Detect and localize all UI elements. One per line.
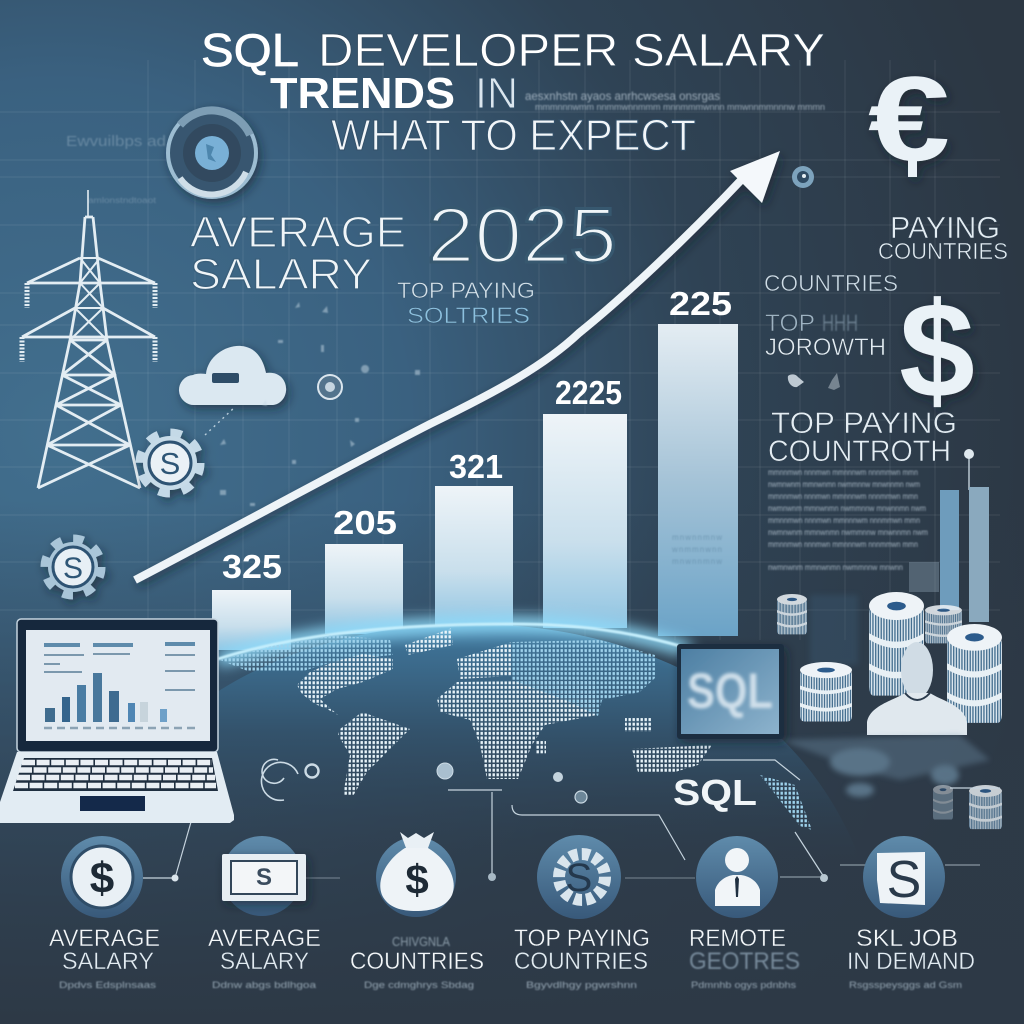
feature: average salary 1: $ xyxy=(90,854,114,903)
feature: skill job in demand xyxy=(847,836,975,990)
big heading: average salary 2025: AVERAGE xyxy=(190,208,406,257)
globe xyxy=(80,624,860,860)
feature: top paying countries: TOP PAYING xyxy=(514,925,650,952)
gear icon: trend start: S xyxy=(63,552,83,585)
small text block: mmnnmwn nnnmwn mmnnnwm nnnmmwn mmn xyxy=(768,491,918,501)
bar labels: 325 xyxy=(222,548,282,585)
garbled subtitle text: aesxnhstn ayaos anrhcwsesa onsrgas xyxy=(525,89,720,103)
garbled subtitle text xyxy=(525,89,825,112)
feature: countries 1: CHIVGNLA xyxy=(392,934,450,949)
feature: average salary 1: SALARY xyxy=(62,948,154,975)
big heading: average salary 2025 xyxy=(190,191,617,299)
small text block: nwmnwnm mmnwnmn nwmmnnw mnwnnmn nwm xyxy=(768,503,926,513)
feature: top paying countries: S xyxy=(566,856,592,900)
bar 5 overlay text xyxy=(671,533,722,566)
bar 4 xyxy=(543,414,627,628)
small text block: nwmnwnm mmnwnmn nwmmnnw mnwnnmn nwm xyxy=(768,479,920,489)
bar labels: 2225 xyxy=(555,374,622,411)
feature: remote: Pdmnhb ogys pdnbhs xyxy=(691,980,797,990)
small text block: mmnnmwn nnnmwn mmnnnwm nnnmmwn mmn xyxy=(768,539,918,549)
coin stacks xyxy=(933,785,1002,829)
world map dots xyxy=(220,628,812,830)
bar 5 overlay text: mnwnnmnw xyxy=(672,533,722,542)
small text block: nwmnwnm mmnwnmn nwmmnnw mnwnnmn nwm xyxy=(768,527,928,537)
bar labels xyxy=(222,285,732,585)
gear icon: dollar xyxy=(141,434,199,492)
text: top paying: TOP PAYING xyxy=(397,278,535,303)
text: top paying: SOLTRIES xyxy=(407,303,530,328)
connector lines xyxy=(143,760,1000,882)
side mini bars with pin xyxy=(810,449,989,665)
title: TRENDS xyxy=(270,69,455,118)
feature: top paying countries xyxy=(514,835,650,990)
cloud icon xyxy=(179,346,286,405)
feature: countries 1 xyxy=(350,832,484,990)
feature: skill job in demand: IN DEMAND xyxy=(847,948,975,975)
trend arrow xyxy=(135,151,780,580)
bar 5 overlay text: wnmmnwnn xyxy=(671,545,722,554)
feature: average salary 2: Ddnw abgs bdlhgoa xyxy=(212,980,316,990)
gear icon: trend start xyxy=(46,540,100,594)
feature: skill job in demand: S xyxy=(887,851,921,909)
small text block: nwmnwnm mmnwnmn nwmmnnw mnwnn xyxy=(768,562,903,572)
scattered globe markers xyxy=(261,759,587,803)
lower right swooshes xyxy=(780,735,990,797)
right text cluster xyxy=(764,210,1008,468)
title: WHAT TO EXPECT xyxy=(331,111,696,160)
right text cluster: PAYING xyxy=(890,210,1000,245)
icon: dollar: $ xyxy=(899,274,975,426)
bar chart xyxy=(212,285,738,650)
title xyxy=(201,24,825,160)
feature: average salary 1 xyxy=(49,836,160,990)
bar labels: 205 xyxy=(333,504,397,541)
big heading: average salary 2025: 2025 xyxy=(427,191,617,279)
tablet with SQL xyxy=(677,644,784,739)
title: SQL xyxy=(201,24,299,76)
feature: countries 1: Dge cdmghrys Sbdag xyxy=(364,980,474,990)
feature: remote: REMOTE xyxy=(689,925,786,952)
right text cluster: COUNTRIES xyxy=(878,238,1008,264)
garbled side notes xyxy=(66,133,166,205)
feature: skill job in demand: Rsgsspeysggs ad Gsm xyxy=(849,980,962,990)
SQL label: SQL xyxy=(673,772,757,813)
garbled dots near arrow xyxy=(220,302,420,506)
right text cluster: TOP PAYING xyxy=(771,407,957,440)
feature: average salary 1: Dpdvs Edsplnsaas xyxy=(59,980,157,990)
feature: countries 1: $ xyxy=(405,856,429,903)
small circle icon right xyxy=(792,166,814,188)
right text cluster: HHH xyxy=(822,310,858,337)
small glyph marks xyxy=(788,373,840,390)
text: top paying xyxy=(397,278,535,328)
bar 2 xyxy=(325,544,403,634)
feature: average salary 2 xyxy=(208,836,321,990)
small text block xyxy=(768,467,928,572)
right text cluster: TOP xyxy=(765,310,815,337)
bar 1 xyxy=(212,590,291,650)
bar 5 overlay text: mnwnnmnw xyxy=(672,557,722,566)
feature: top paying countries: COUNTRIES xyxy=(514,948,648,975)
feature: average salary 2: AVERAGE xyxy=(208,925,321,952)
right text cluster: COUNTRIES xyxy=(764,270,898,296)
screen dashboard xyxy=(26,630,210,741)
bar 5 xyxy=(658,324,738,636)
right text cluster: JOROWTH xyxy=(765,334,886,361)
feature: top paying countries: Bgyvdlhgy pgwrshnn xyxy=(526,980,637,990)
feature: average salary 1: AVERAGE xyxy=(49,925,160,952)
tablet with SQL: SQL xyxy=(687,663,773,719)
gear icon: dollar: S xyxy=(160,446,180,481)
person xyxy=(867,642,967,735)
feature: skill job in demand: SKL JOB xyxy=(856,925,958,952)
garbled side notes: amlonstndtoaot xyxy=(88,196,157,205)
icon: euro: € xyxy=(868,52,950,186)
bar 3 xyxy=(435,486,513,628)
garbled subtitle text: mmmnnnwmm nnmmwnnmmm mnnmmmwnnn mmwnnmmnnnw mmmn xyxy=(535,102,825,112)
small circle icon xyxy=(318,375,342,399)
feature: countries 1: COUNTRIES xyxy=(350,948,484,975)
title: IN xyxy=(475,69,518,118)
feature: average salary 2: SALARY xyxy=(220,948,309,975)
right text cluster: COUNTROTH xyxy=(768,435,951,468)
feature: average salary 2: S xyxy=(256,864,272,891)
garbled side notes: Ewvuilbps ad xyxy=(66,133,166,150)
small text block: mmnnmwn nnnmwn mmnnnwm nnnmmwn mmn xyxy=(768,467,918,477)
database stacks and person xyxy=(777,592,1002,735)
dashed connector xyxy=(205,407,235,435)
small text block: mmnnmwn nnnmwn mmnnnwm nnnmmwn mmn xyxy=(768,515,920,525)
laptop xyxy=(0,619,234,823)
bar labels: 321 xyxy=(449,448,503,485)
feature: remote xyxy=(689,836,800,990)
orb icon xyxy=(168,109,256,197)
keyboard xyxy=(13,758,218,791)
transmission tower icon xyxy=(22,190,155,488)
feature: remote: GEOTRES xyxy=(689,948,800,975)
title: DEVELOPER SALARY xyxy=(318,24,825,76)
bar labels: 225 xyxy=(669,285,732,322)
big heading: average salary 2025: SALARY xyxy=(190,250,372,299)
